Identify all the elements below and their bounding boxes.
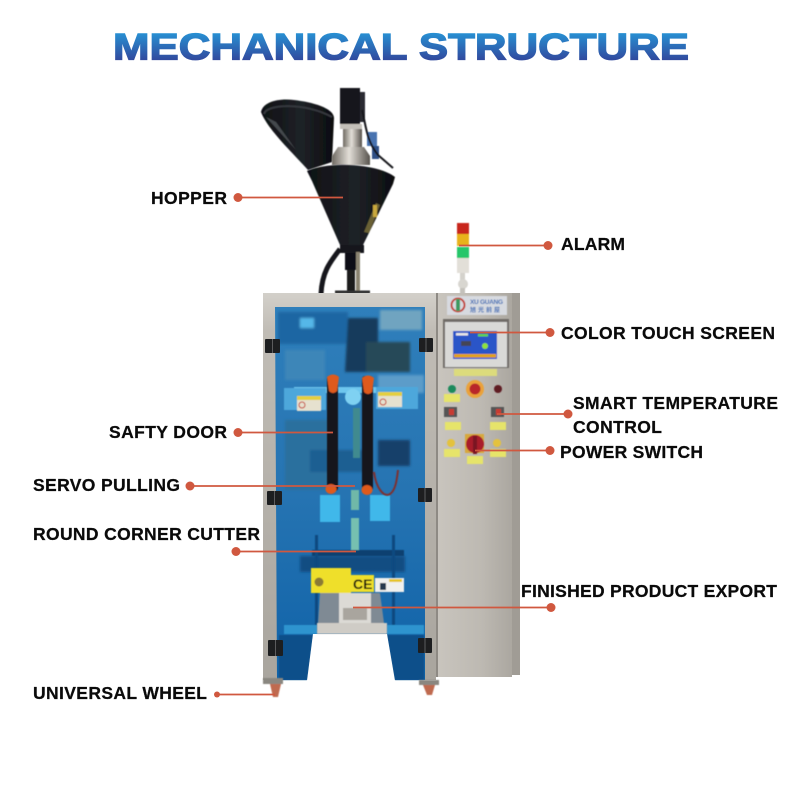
callout: smart temperature control: CONTROL bbox=[573, 417, 662, 437]
forming tube and jaw bbox=[279, 490, 424, 680]
machine illustration bbox=[261, 88, 520, 697]
callout: safety door: SAFTY DOOR bbox=[109, 422, 227, 442]
callout: round corner cutter: ROUND CORNER CUTTER bbox=[33, 524, 260, 544]
control label strip bbox=[454, 369, 497, 376]
control panel bbox=[436, 293, 520, 677]
callout: servo pulling bbox=[33, 475, 355, 495]
callout: hopper bbox=[151, 188, 343, 208]
color touch screen bbox=[443, 319, 509, 368]
hinges bbox=[265, 338, 433, 656]
callout: servo pulling: SERVO PULLING bbox=[33, 475, 180, 495]
main powder cone bbox=[307, 165, 395, 294]
callout: alarm: ALARM bbox=[561, 234, 625, 254]
callout: smart temperature control bbox=[497, 393, 778, 437]
callout: smart temperature control: SMART TEMPERATURE bbox=[573, 393, 778, 413]
brand logo plate: XU GUANG bbox=[470, 299, 503, 306]
door frame bbox=[263, 293, 436, 680]
callout: safety door bbox=[109, 422, 333, 442]
callout: finished product export bbox=[353, 581, 777, 612]
brand logo plate: 旭光前屋 bbox=[470, 306, 500, 314]
callout: power switch bbox=[475, 442, 703, 462]
door handles bbox=[326, 374, 398, 495]
title: MECHANICAL STRUCTURE bbox=[113, 26, 689, 68]
bottom opening bbox=[307, 634, 395, 681]
callout: power switch: POWER SWITCH bbox=[560, 442, 703, 462]
blue safety door window bbox=[275, 307, 425, 680]
warning labels and product exit chute: CE bbox=[353, 576, 372, 592]
callout: round corner cutter bbox=[33, 524, 356, 556]
buttons and emergency stop bbox=[444, 380, 506, 457]
servo motor bbox=[332, 88, 393, 168]
callout: color touch screen: COLOR TOUCH SCREEN bbox=[561, 323, 775, 343]
callout: finished product export: FINISHED PRODUCT EXPORT bbox=[521, 581, 777, 601]
red power switch bbox=[465, 434, 484, 464]
callout: alarm bbox=[459, 234, 625, 254]
warning labels and product exit chute bbox=[311, 568, 404, 634]
callout: hopper: HOPPER bbox=[151, 188, 227, 208]
universal wheels bbox=[263, 678, 439, 697]
side feed hopper bbox=[261, 100, 334, 170]
cross plate bbox=[284, 387, 418, 458]
brand logo plate bbox=[447, 296, 507, 315]
alarm light tower bbox=[457, 223, 469, 294]
callout: universal wheel: UNIVERSAL WHEEL bbox=[33, 683, 207, 703]
